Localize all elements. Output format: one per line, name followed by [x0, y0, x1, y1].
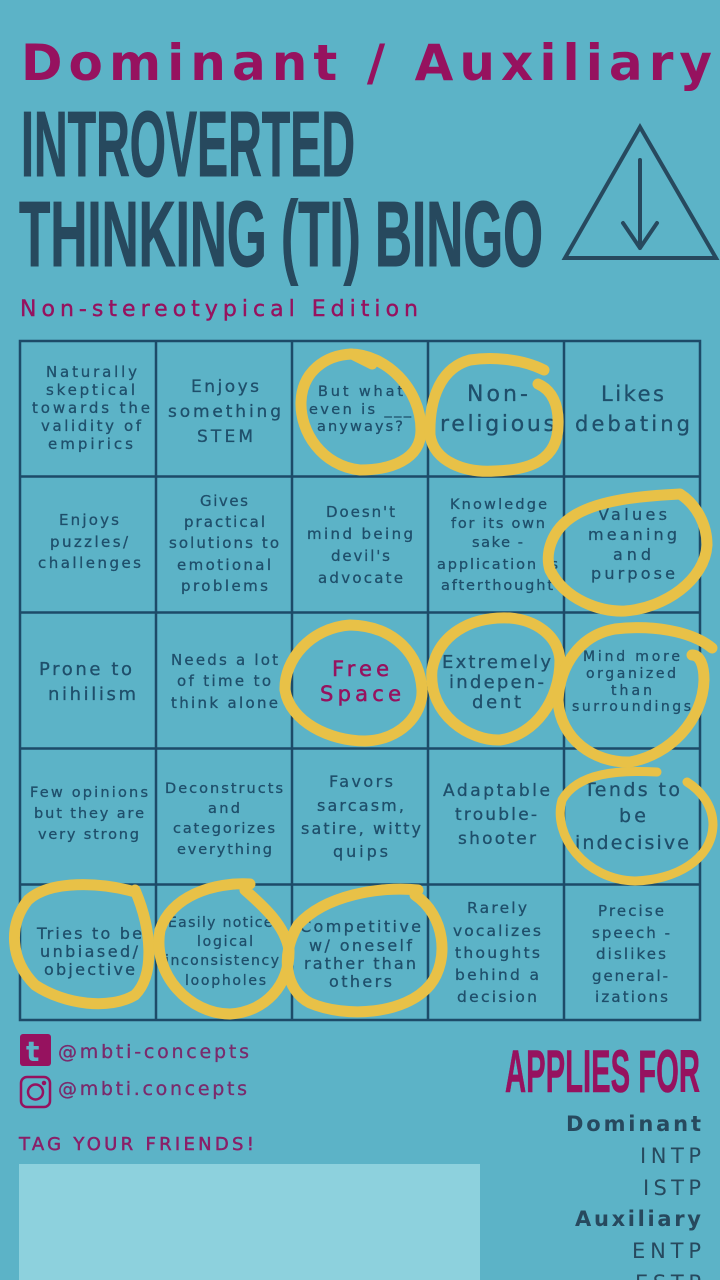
list: types [566, 1112, 701, 1280]
cell: Adaptable troubleshooter: Adaptable [443, 781, 550, 801]
cell: Deconstructs and categorizes: categorizes [173, 821, 275, 837]
panel: blank tag box [19, 1164, 480, 1280]
cell: But what even is: even is ___ [309, 402, 412, 418]
cell: Naturally skeptical [32, 363, 150, 453]
subtitle: Non-stereotypical Edition [20, 297, 418, 322]
cell: Doesn't mind being devil's advocate: Doesn't [326, 503, 395, 521]
cell: Gives practical solutions [169, 492, 279, 595]
cell: Enjoys puzzles/challenges [38, 511, 141, 572]
cell: Few opinions [30, 785, 148, 843]
cell: Enjoys puzzles/challenges: puzzles/ [50, 533, 129, 551]
cell: Needs a lot of time [171, 651, 278, 712]
cell: Tries to be unbiased: objective [44, 960, 135, 979]
cell: Needs a lot of time: think alone [171, 694, 278, 712]
cell: Naturally skeptical: validity of [41, 417, 142, 435]
grid lines [20, 341, 700, 1020]
title: Introverted Thinking (Ti) Bingo [19, 92, 543, 286]
icon: tumblr [20, 1034, 51, 1068]
cell: Gives practical solutions: emotional [177, 556, 271, 574]
cell: But what even is [309, 384, 412, 435]
cell: Mind more organized [572, 649, 691, 715]
cell: Easily notices inconsistency: inconsistency [165, 953, 279, 969]
cell: Adaptable troubleshooter: trouble- [455, 805, 537, 825]
icon: triangle with down arrow [565, 127, 716, 258]
circle: Competitive [287, 889, 442, 1012]
cell: Gives practical solutions: problems [181, 577, 268, 595]
cell: Deconstructs and categorizes: everything [177, 842, 272, 858]
cell: Mind more organized: Mind more [583, 649, 680, 665]
cell: Naturally skeptical: empirics [48, 435, 133, 453]
cell: Doesn't mind being devil's advocate: mind being [307, 525, 413, 543]
cell: Values meaning and purpose: Values [598, 505, 667, 524]
marker circles [14, 354, 713, 1014]
cell: Competitive with oneself [300, 917, 421, 991]
cell: But what even is: But what [318, 384, 403, 400]
cell: Competitive with oneself: Competitive [300, 917, 421, 936]
cell: Values meaning and purpose [588, 505, 677, 583]
circle: Values meaning [548, 494, 707, 611]
cell: Knowledge for its own sake: sake - [472, 535, 523, 551]
cell: Non-religious: Non- [467, 382, 528, 407]
cell: Tries to be unbiased [36, 924, 142, 979]
cell: Few opinions: Few opinions [30, 785, 148, 801]
cell: Enjoys something STEM: Enjoys [191, 377, 259, 397]
cell: Favors sarcasm: sarcasm, [317, 796, 404, 815]
circle: Free Space [285, 625, 422, 741]
handle: instagram: @mbti.concepts [58, 1078, 247, 1100]
cell: Rarely vocalizes [453, 899, 541, 1006]
cell: Deconstructs and categorizes: Deconstructs [165, 781, 283, 797]
cell: Precise speech [592, 902, 670, 1006]
cell: Values meaning and purpose: purpose [591, 564, 675, 583]
cell: Enjoys something STEM: STEM [197, 427, 253, 447]
cell: Competitive with oneself: others [329, 972, 392, 991]
cell: Precise speech: speech - [592, 924, 670, 942]
cell: Adaptable troubleshooter [443, 781, 550, 849]
cell: Precise speech: Precise [598, 902, 664, 920]
cell: Mind more organized: organized [586, 666, 676, 682]
cell: Tends to be indecisive [575, 779, 689, 854]
cell: Precise speech: general- [592, 967, 668, 985]
cell: Values meaning and purpose: meaning [588, 525, 677, 544]
cell: Tends to be indecisive: indecisive [575, 832, 689, 854]
cell: Prone to nihilism [39, 659, 136, 705]
cell: Favors sarcasm: satire, witty [301, 819, 421, 838]
cell: Knowledge for its own sake: for its own [451, 516, 545, 532]
cell: Gives practical solutions: Gives [200, 492, 248, 510]
list: types: Dominant [566, 1112, 701, 1136]
cell: Precise speech: izations [595, 988, 668, 1006]
cell: Free Space [320, 657, 401, 706]
cell: Mind more organized: than [611, 683, 652, 699]
circle: Mind more organized [558, 628, 712, 762]
cell: Favors sarcasm [301, 772, 421, 861]
cell: Doesn't mind being devil's advocate: devil's [331, 547, 390, 565]
list: types: Auxiliary [575, 1207, 701, 1231]
cell: Enjoys something STEM: something [168, 402, 281, 422]
cell: Easily notices inconsistency [165, 915, 281, 989]
cell: Likes debating [575, 382, 690, 436]
cell: Prone to nihilism: nihilism [48, 684, 136, 705]
circle: Extremely independent [432, 618, 560, 740]
cell: Favors sarcasm: quips [333, 842, 388, 861]
cell: Prone to nihilism: Prone to [39, 659, 132, 680]
cell: Gives practical solutions: solutions to [169, 534, 279, 552]
circle: Tries to be unbiased [14, 885, 149, 1004]
cell: Knowledge for its own sake: application is [437, 557, 558, 573]
cell: Tries to be unbiased: unbiased/ [40, 942, 139, 961]
cell: Mind more organized: surroundings [572, 699, 691, 715]
cell: Needs a lot of time: Needs a lot [171, 651, 278, 669]
circle: Non-religious [430, 359, 558, 471]
circle: But what even is [301, 354, 421, 470]
cell: Likes debating: Likes [601, 382, 664, 406]
circle: Tends to be indecisive [560, 771, 713, 881]
cell: Extremely independent: indepen- [449, 672, 544, 693]
cell: Naturally skeptical: Naturally [46, 363, 137, 381]
cell: Values meaning and purpose: and [613, 545, 651, 564]
cell: Naturally skeptical: towards the [32, 399, 150, 417]
heading: Dominant / Auxiliary: Dominant / Auxiliary [21, 34, 712, 92]
cell: Competitive with oneself: rather than [304, 954, 416, 973]
cell: Favors sarcasm: Favors [329, 772, 393, 791]
cell: Deconstructs and categorizes: and [208, 801, 240, 817]
title: Introverted Thinking (Ti) Bingo: INTROVERTED [21, 92, 355, 196]
cell: Few opinions: but they are [34, 806, 144, 822]
cell: Non-religious: religious [440, 412, 555, 437]
cell: Extremely independent: Extremely [442, 652, 551, 673]
circle: Easily notices [159, 884, 289, 1014]
cell: Easily notices inconsistency: logical [197, 934, 253, 950]
cell: Gives practical solutions: practical [184, 513, 265, 531]
list: types: ENTP [632, 1239, 701, 1263]
cell: Easily notices inconsistency: loopholes [185, 973, 266, 989]
call to action: TAG YOUR FRIENDS! [18, 1134, 254, 1155]
cell: Few opinions: very strong [38, 827, 139, 843]
cell: Precise speech: dislikes [596, 945, 666, 963]
icon: tumblr: t [26, 1035, 39, 1068]
cell: Extremely independent: dent [472, 692, 521, 713]
cell: Non-religious [440, 382, 555, 437]
cell: Free Space: Space [320, 682, 401, 706]
cell: Tries to be unbiased: Tries to be [36, 924, 142, 943]
cell: Extremely independent [442, 652, 551, 713]
cell: Tends to be indecisive: Tends to [583, 779, 680, 801]
cell: Easily notices inconsistency: Easily notices [168, 915, 281, 931]
cell: Likes debating: debating [575, 412, 690, 436]
cell: Tends to be indecisive: be [619, 805, 646, 827]
cell: Rarely vocalizes: decision [457, 988, 537, 1006]
cell: Competitive with oneself: w/ oneself [309, 936, 412, 955]
handle: tumblr: @mbti-concepts [58, 1041, 249, 1063]
cell: Rarely vocalizes: Rarely [467, 899, 527, 917]
cell: Enjoys puzzles/challenges: challenges [38, 554, 141, 572]
cell: Knowledge for its own sake: Knowledge [450, 497, 547, 513]
cell: Adaptable troubleshooter: shooter [458, 829, 536, 849]
icon: instagram [21, 1077, 50, 1107]
panel: bingo grid [20, 341, 700, 1020]
list: types: INTP [640, 1144, 701, 1168]
cell: Free Space: Free [332, 657, 389, 681]
cell: Rarely vocalizes: vocalizes [453, 922, 541, 940]
cell: Knowledge for its own sake [437, 497, 558, 594]
cell: Needs a lot of time: of time to [177, 672, 271, 690]
cell: Deconstructs and categorizes [165, 781, 283, 858]
cell: Enjoys puzzles/challenges: Enjoys [59, 511, 119, 529]
cell: Naturally skeptical: skeptical [46, 381, 135, 399]
cell: Knowledge for its own sake: afterthought [441, 578, 553, 594]
cell: But what even is: anyways? [317, 419, 403, 435]
cell: Doesn't mind being devil's advocate [307, 503, 413, 587]
list: types: ISTP [643, 1176, 701, 1200]
cell: Rarely vocalizes: thoughts [455, 944, 540, 962]
cell: Enjoys something STEM [168, 377, 281, 447]
cell: Doesn't mind being devil's advocate: advocate [318, 569, 403, 587]
cell: Rarely vocalizes: behind a [455, 966, 539, 984]
